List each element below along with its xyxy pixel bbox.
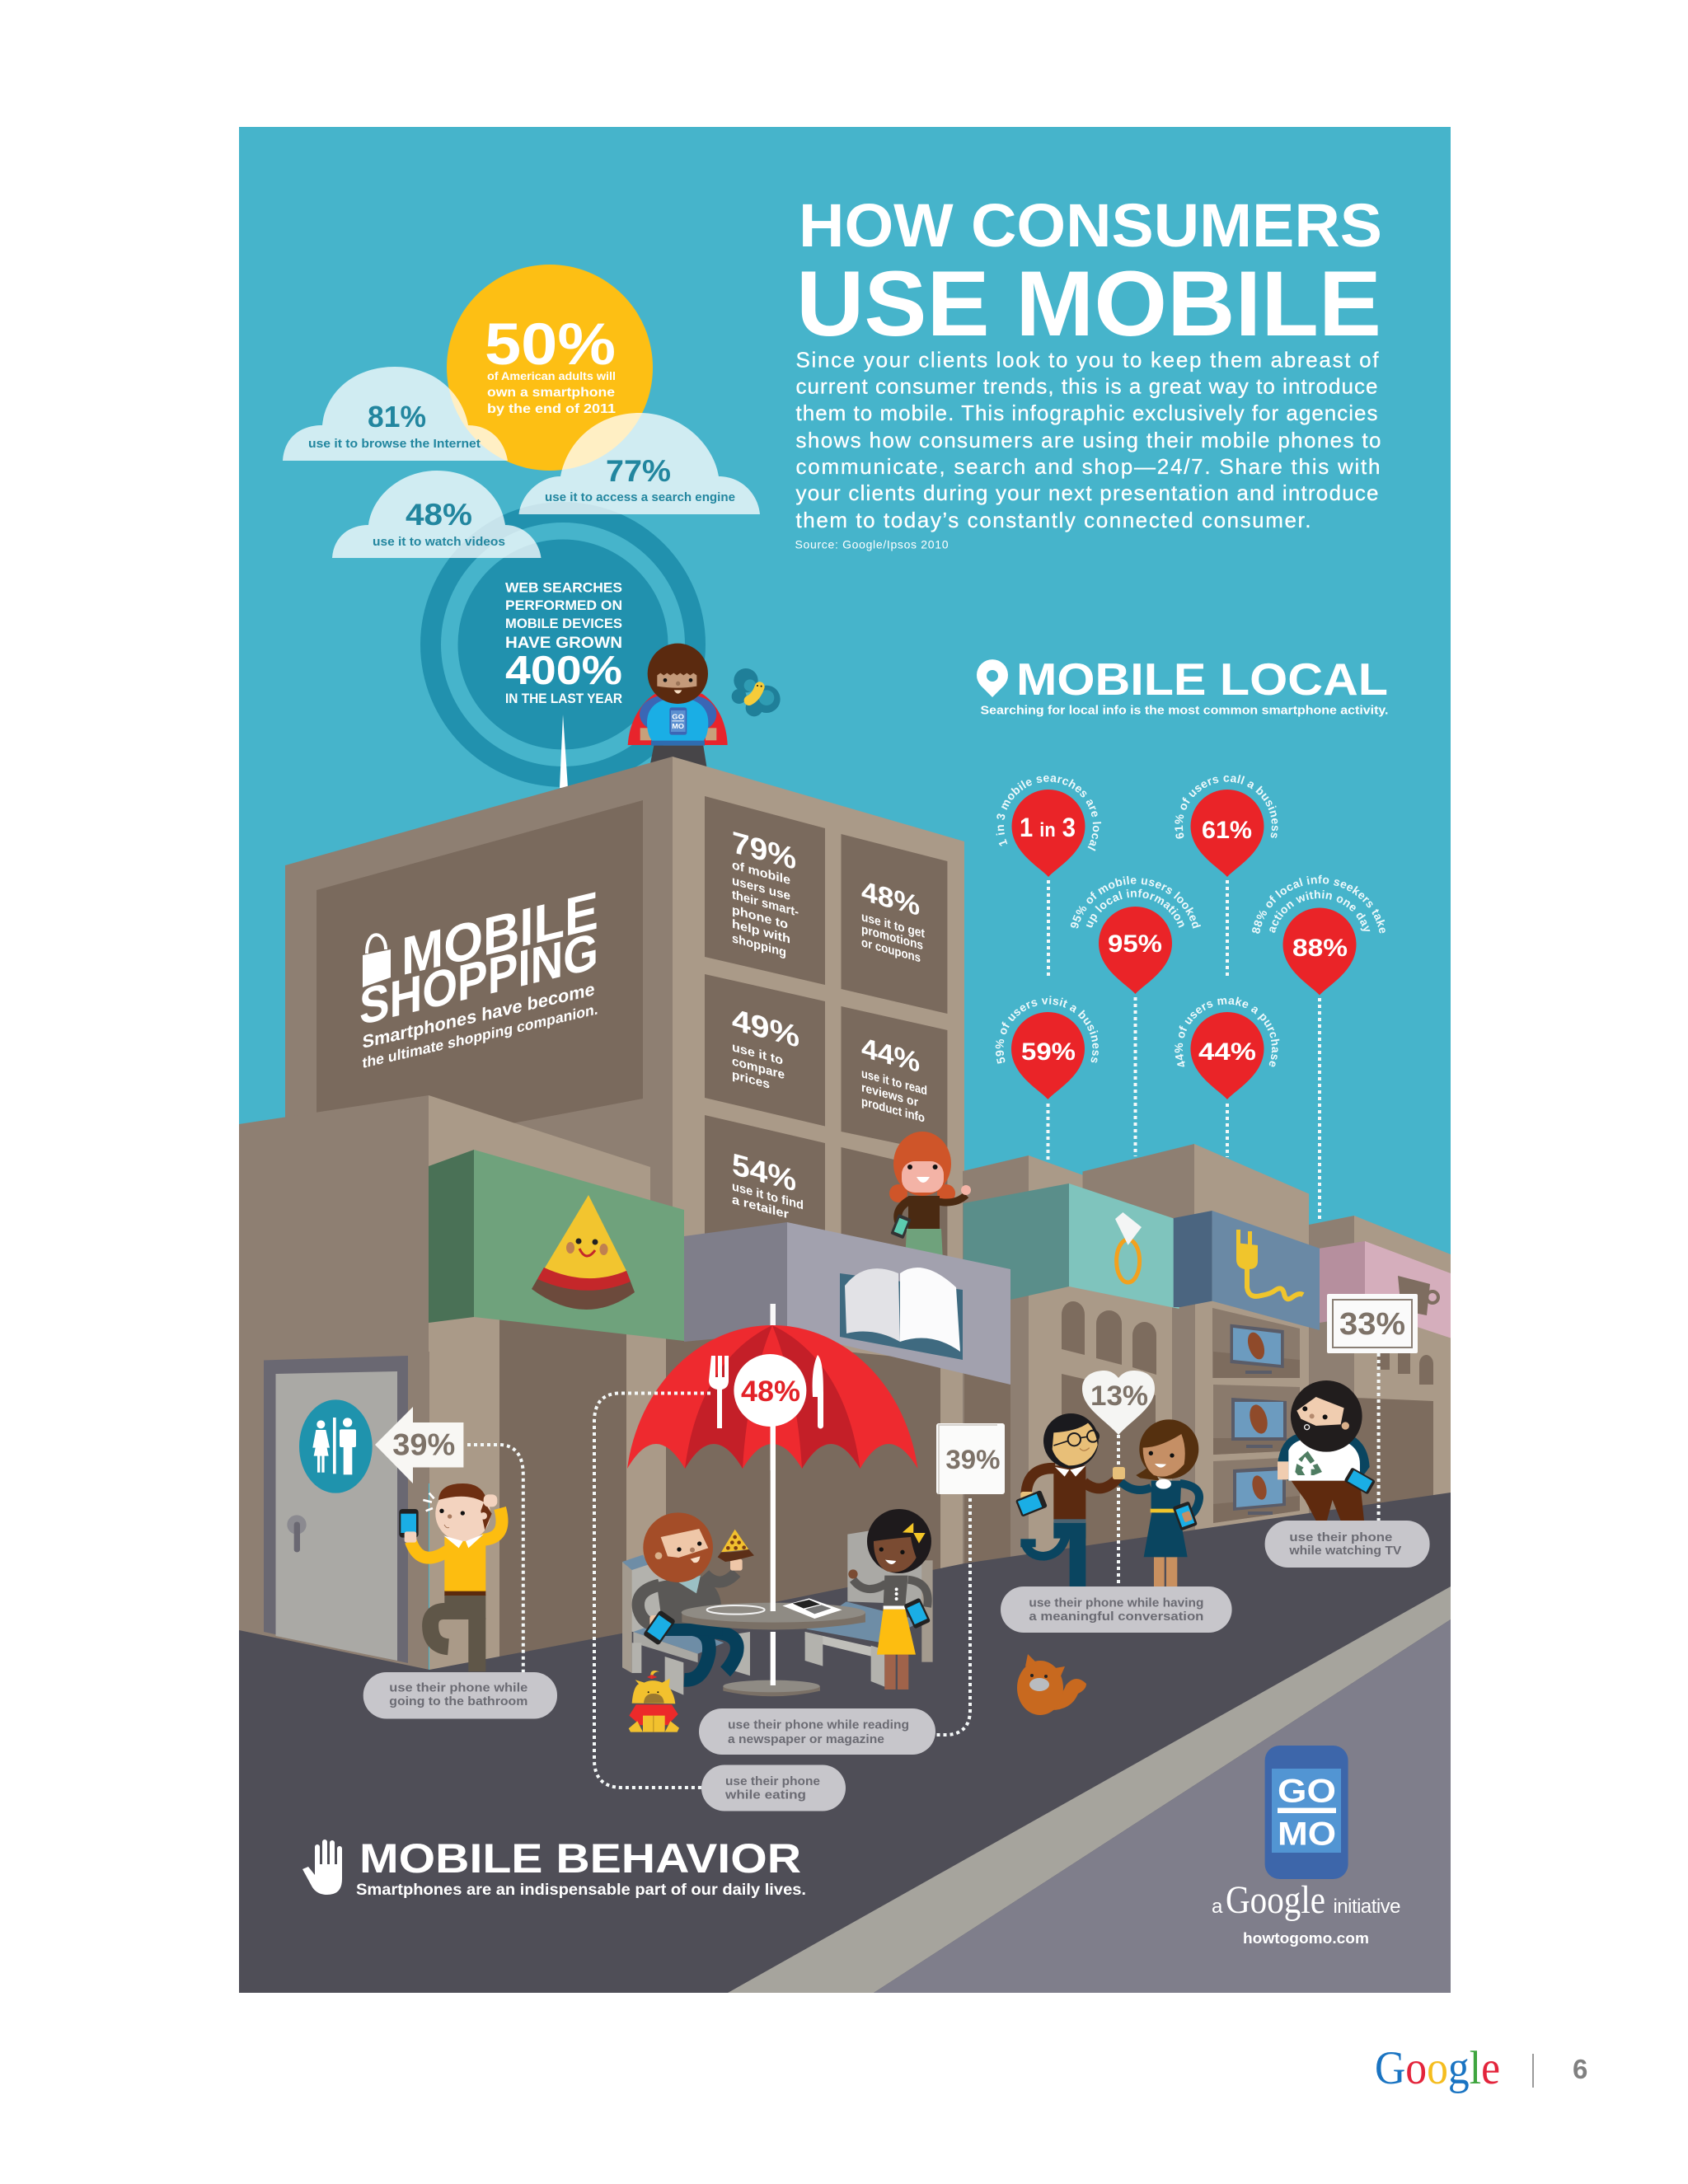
mobile behavior heading: Smartphones are an indispensable part of our daily lives. — [356, 1882, 806, 1899]
title: USE MOBILE — [796, 252, 1381, 355]
panel: 49 percent: prices — [732, 1068, 770, 1092]
google initiative line: a — [1212, 1896, 1223, 1918]
arrow callout: 39 percent: 39% — [392, 1428, 455, 1462]
icon: fork — [709, 1356, 729, 1428]
cloud: 77 percent: use it to access a search engine — [545, 490, 735, 504]
label: reading: use their phone while reading — [728, 1718, 909, 1732]
couple — [1015, 1380, 1376, 1586]
website url: howtogomo.com — [1243, 1930, 1369, 1947]
pin: 59 percent: 59% — [1021, 1038, 1076, 1066]
panel: mobile shopping sign: the ultimate shopping companion. — [363, 1000, 598, 1071]
pin: 95 percent: up local information — [1086, 888, 1184, 928]
icon: shopping bag — [363, 935, 391, 987]
panel: 49 percent: use it to — [732, 1040, 783, 1068]
panel: 48 percent: use it to get — [861, 910, 925, 941]
panel: 44 percent: 44% — [861, 1033, 920, 1079]
woman with yellow skirt — [848, 1509, 931, 1690]
label: eating: use their phone — [725, 1774, 820, 1788]
pin: 88 percent: 88% — [1292, 935, 1348, 962]
bearded man eating pizza — [638, 1512, 754, 1680]
gomo logo: GO — [1278, 1773, 1336, 1809]
tv shop panels — [1212, 1308, 1300, 1523]
panel: 79 percent: help with — [732, 917, 790, 947]
sun with 50 percent stat — [447, 265, 653, 471]
mobile local heading: Searching for local info is the most common smartphone activity. — [981, 704, 1388, 717]
source note: Source: Google/Ipsos 2010 — [795, 538, 949, 551]
mobile local heading — [977, 659, 1388, 717]
panel: 79 percent: their smart- — [732, 888, 799, 920]
cloud: 48 percent: use it to watch videos — [373, 535, 505, 549]
google initiative line — [1212, 1878, 1401, 1922]
gomo logo — [1265, 1746, 1348, 1879]
dotted connector: conversation — [1117, 1435, 1120, 1584]
cloud: 81 percent — [283, 367, 508, 461]
web searches text: IN THE LAST YEAR — [505, 691, 622, 706]
small windows and door — [1355, 1353, 1433, 1512]
icon: recycle — [1295, 1451, 1322, 1475]
right bench — [805, 1530, 933, 1687]
dotted pin connectors — [1048, 880, 1320, 1221]
label: watching tv — [1265, 1521, 1430, 1568]
web searches text: 400% — [505, 649, 622, 693]
label: bathroom: use their phone while — [389, 1681, 528, 1695]
phone — [643, 1610, 676, 1646]
panel: 54 percent — [705, 1115, 825, 1233]
intro paragraph: them to today’s constantly connected consumer. — [796, 508, 1311, 532]
poster — [239, 127, 1451, 1993]
mobile behavior heading — [302, 1835, 806, 1899]
cafe table — [682, 1467, 865, 1696]
web searches text: MOBILE DEVICES — [505, 616, 622, 631]
man in yellow sweater — [399, 1483, 502, 1671]
panel: cafe sign — [1320, 1241, 1451, 1338]
pin: 95 percent: 95% — [1108, 930, 1162, 958]
dotted connector: eating — [594, 1393, 710, 1788]
panel: 44 percent: use it to read — [861, 1066, 927, 1099]
web searches ring graphic — [420, 502, 706, 787]
label: watching tv: use their phone — [1289, 1530, 1392, 1544]
panel: 49 percent: compare — [732, 1054, 785, 1082]
pin: 44 percent — [1175, 997, 1279, 1099]
pin: 44 percent: 44% of users make a purchase — [1175, 997, 1279, 1066]
label: bathroom: going to the bathroom — [389, 1694, 528, 1708]
panel: jewellery sign — [964, 1183, 1179, 1310]
intro paragraph: shows how consumers are using their mobile phones to — [796, 428, 1381, 452]
label: bathroom — [363, 1672, 557, 1719]
panel: mobile shopping sign: Smartphones have become — [363, 978, 595, 1052]
panel: electronics sign — [1174, 1211, 1320, 1330]
table scene — [622, 1467, 933, 1732]
panel: 44 percent — [841, 1006, 947, 1154]
label: conversation: use their phone while having — [1029, 1596, 1203, 1610]
page number: 6 — [1573, 2054, 1587, 2084]
left lower building — [239, 1095, 1010, 1681]
pin: 88 percent: action within one day — [1269, 890, 1370, 933]
panel: mobile shopping sign: MOBILE — [401, 879, 598, 987]
callout: 33 percent — [1327, 1294, 1418, 1353]
pin: 1 in 3: 1 in 3 mobile searches are local — [996, 776, 1101, 851]
intro paragraph: your clients during your next presentation and introduce — [796, 480, 1378, 505]
sky background — [239, 127, 1451, 1670]
pin: 88 percent: 88% of local info seekers take — [1252, 875, 1386, 934]
hero character on roof: MO — [672, 722, 684, 730]
dotted connector: bathroom — [467, 1445, 523, 1672]
icon: mug — [1398, 1276, 1438, 1315]
arrow callout: 39 percent — [375, 1407, 463, 1483]
label: eating: while eating — [724, 1788, 806, 1802]
panel: mobile shopping sign: SHOPPING — [359, 922, 598, 1037]
left bench — [622, 1555, 750, 1695]
heart callout: 13 percent — [1082, 1371, 1155, 1435]
hero character on roof: GO — [672, 712, 684, 720]
panel: 48 percent: 48% — [861, 876, 920, 922]
web searches text: HAVE GROWN — [505, 635, 622, 652]
panel: 49 percent: 49% — [732, 1002, 799, 1054]
pin: 88 percent — [1252, 875, 1386, 996]
arched windows — [1062, 1301, 1156, 1375]
footer divider — [1532, 2054, 1534, 2088]
panel: 79 percent: 79% — [732, 825, 796, 876]
right street buildings — [963, 1144, 1451, 1607]
panel: 79 percent: of mobile — [732, 858, 790, 888]
restroom door — [264, 1356, 408, 1663]
panel: 79 percent — [705, 796, 825, 985]
antenna — [560, 715, 568, 788]
icon: tv 2 — [1231, 1398, 1287, 1448]
cat — [1017, 1654, 1086, 1715]
butterfly — [732, 668, 781, 716]
dog with red cape — [629, 1671, 679, 1732]
panel: green pizza sign — [429, 1150, 684, 1341]
intro paragraph: them to mobile. This infographic exclusively for agencies — [796, 401, 1378, 425]
google initiative line: Google — [1226, 1878, 1325, 1922]
mobile local heading: MOBILE LOCAL — [1016, 654, 1388, 705]
book callout: 39 percent: 39% — [945, 1445, 1000, 1474]
heart callout: 13 percent: 13% — [1090, 1380, 1148, 1412]
panel: 44 percent: product info — [861, 1094, 925, 1126]
google initiative line: initiative — [1334, 1896, 1401, 1918]
panel: 79 percent: users use — [732, 874, 790, 903]
intro paragraph — [796, 348, 1381, 532]
panel: 48 percent: or coupons — [861, 935, 921, 965]
pin: 44 percent: 44% — [1198, 1038, 1256, 1066]
tv man with beard — [1278, 1380, 1376, 1521]
pin: 59 percent: 59% of users visit a business — [996, 996, 1099, 1064]
cloud: 77 percent: 77% — [606, 454, 671, 488]
pin: 95 percent — [1070, 875, 1201, 994]
intro paragraph: Since your clients look to you to keep them abreast of — [796, 348, 1379, 373]
cloud: 77 percent — [519, 413, 760, 514]
panel: 79 percent: shopping — [732, 931, 786, 960]
icon: restroom sign — [299, 1399, 373, 1493]
icon: pizza slice — [532, 1195, 635, 1310]
callout: 33 percent: 33% — [1339, 1307, 1405, 1342]
icon: diamond ring — [1115, 1212, 1142, 1282]
label: conversation — [1001, 1586, 1232, 1633]
panel: 49 percent — [705, 974, 825, 1126]
icon: location pin — [977, 659, 1008, 697]
48 percent badge: 48% — [741, 1376, 800, 1408]
cloud: 48 percent — [332, 471, 541, 558]
panel: 48 percent: promotions — [861, 922, 923, 953]
cloud: 48 percent: 48% — [406, 498, 472, 532]
label: watching tv: while watching TV — [1288, 1544, 1401, 1558]
book callout: 39 percent — [936, 1423, 1005, 1494]
sidewalk curb — [728, 1586, 1451, 1993]
icon: hand — [302, 1840, 342, 1895]
label: reading: a newspaper or magazine — [728, 1732, 884, 1746]
door handle — [287, 1515, 307, 1552]
intro paragraph: current consumer trends, this is a great way to introduce — [796, 374, 1378, 399]
pin: 59 percent — [996, 996, 1099, 1099]
woman in navy dress — [1121, 1419, 1199, 1586]
cloud: 81 percent: use it to browse the Internet — [308, 437, 481, 451]
label: eating — [701, 1765, 846, 1811]
dotted connector: tv — [1377, 1353, 1381, 1521]
title — [801, 203, 1380, 336]
road — [239, 1493, 1451, 1993]
48 percent badge — [734, 1354, 806, 1427]
panel: 48 percent — [841, 834, 947, 1014]
sun with 50 percent stat: own a smartphone — [487, 386, 615, 400]
man with glasses — [1015, 1413, 1125, 1586]
empty window — [841, 1147, 948, 1256]
icon: knife — [813, 1355, 823, 1429]
intro paragraph: communicate, search and shop—24/7. Share this with — [796, 454, 1380, 479]
panel: 54 percent: use it to find — [732, 1179, 804, 1212]
label: reading — [699, 1708, 935, 1755]
icon: tv 3 — [1233, 1466, 1286, 1515]
panel: book sign — [684, 1222, 1010, 1385]
sidewalk — [874, 1619, 1451, 1993]
icon: open book — [840, 1268, 963, 1360]
web searches text — [505, 580, 622, 706]
icon: plug — [1236, 1230, 1303, 1299]
web searches text: WEB SEARCHES — [505, 580, 622, 596]
mobile behavior heading: MOBILE BEHAVIOR — [359, 1835, 801, 1882]
panel: 79 percent: phone to — [732, 903, 788, 932]
pin: 61 percent: 61% — [1202, 817, 1252, 844]
cloud: 81 percent: 81% — [368, 400, 426, 434]
web searches text: PERFORMED ON — [505, 598, 622, 613]
dotted connector: reading — [936, 1496, 970, 1735]
hero character on roof — [628, 644, 728, 766]
panel: 54 percent: 54% — [732, 1146, 796, 1197]
phone — [903, 1598, 931, 1629]
sun with 50 percent stat: 50% — [485, 312, 616, 377]
title: HOW CONSUMERS — [799, 191, 1382, 260]
panel: 54 percent: a retailer — [732, 1193, 789, 1222]
footer google logo: Google — [1375, 2042, 1500, 2094]
pin: 1 in 3: 1 in 3 — [1020, 813, 1076, 842]
sun with 50 percent stat: by the end of 2011 — [487, 402, 616, 416]
label: conversation: a meaningful conversation — [1029, 1610, 1203, 1624]
panel: mobile shopping sign — [316, 800, 643, 1122]
panel: 44 percent: reviews or — [861, 1080, 918, 1110]
redhead woman with phone — [889, 1132, 971, 1261]
icon: tv 1 — [1230, 1324, 1284, 1374]
pizza slice — [718, 1530, 754, 1562]
gomo logo: MO — [1278, 1816, 1336, 1853]
sun with 50 percent stat: of American adults will — [487, 369, 616, 382]
restroom sign, handle and man — [287, 1399, 502, 1671]
pin: 61 percent — [1175, 775, 1278, 877]
pin: 61 percent: 61% of users call a business — [1175, 775, 1278, 839]
main shopping building — [285, 757, 964, 1483]
umbrella — [627, 1304, 918, 1470]
pin: 95 percent: 95% of mobile users looked — [1070, 875, 1201, 929]
